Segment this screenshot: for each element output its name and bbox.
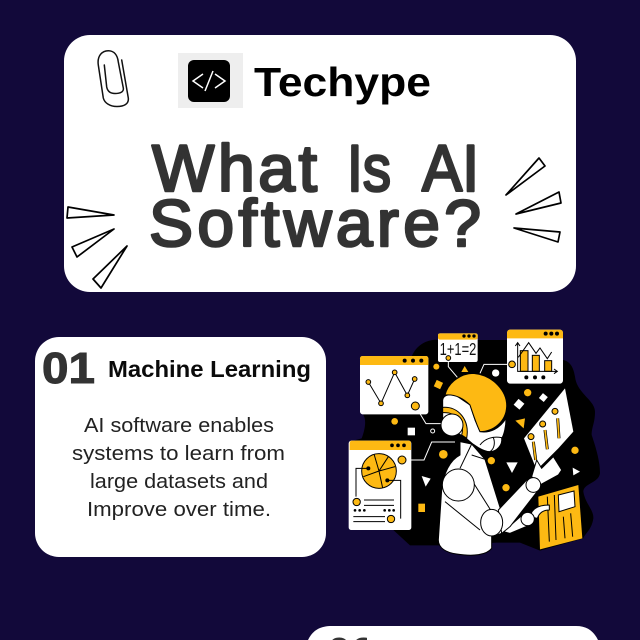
panel: bar chart window xyxy=(507,330,563,384)
body text: systems to learn from xyxy=(72,443,285,465)
title: What xyxy=(152,131,317,205)
logo: Techype: Techype xyxy=(254,59,431,105)
body text: large datasets and xyxy=(90,471,268,493)
icon: right burst lines xyxy=(506,158,561,242)
connector lines xyxy=(402,358,512,460)
head shell xyxy=(443,395,506,452)
icon: paperclip xyxy=(98,51,128,106)
title xyxy=(149,131,481,260)
title: Is xyxy=(347,131,391,205)
shoulder joint xyxy=(442,469,474,501)
connector nodes xyxy=(398,356,515,464)
title: AI xyxy=(422,131,479,205)
body text xyxy=(72,415,285,521)
panel: Machine Learning card xyxy=(35,337,326,557)
number 01: 01 xyxy=(42,344,95,393)
tablet with bars xyxy=(524,388,573,470)
body text: Improve over time. xyxy=(87,499,271,521)
floating shapes xyxy=(391,364,580,512)
panel: equation window xyxy=(438,333,478,362)
torso xyxy=(438,442,502,555)
body text: AI software enables xyxy=(84,415,274,437)
forearm xyxy=(498,480,538,533)
ear ring xyxy=(443,407,467,438)
robot figure xyxy=(438,373,562,555)
dark backdrop blob xyxy=(350,340,600,551)
elbow joint xyxy=(481,509,503,536)
panel: next card, partially visible xyxy=(308,626,598,640)
helmet dome xyxy=(445,373,507,432)
panel: header card xyxy=(64,35,576,292)
panel: pie chart window xyxy=(349,441,411,530)
panel: equation window: 1+1=2 xyxy=(440,339,476,359)
icon: left burst lines xyxy=(67,207,127,288)
title: Software? xyxy=(149,186,481,260)
hand xyxy=(532,457,562,485)
logo: Techype xyxy=(178,53,431,108)
lower arm and grip xyxy=(503,505,549,533)
yellow folder xyxy=(538,485,582,549)
heading: Machine Learning: Machine Learning xyxy=(108,356,311,382)
ear disc xyxy=(441,414,463,436)
illustration: robot with data panels xyxy=(349,330,600,555)
panel: line chart window xyxy=(360,356,428,414)
